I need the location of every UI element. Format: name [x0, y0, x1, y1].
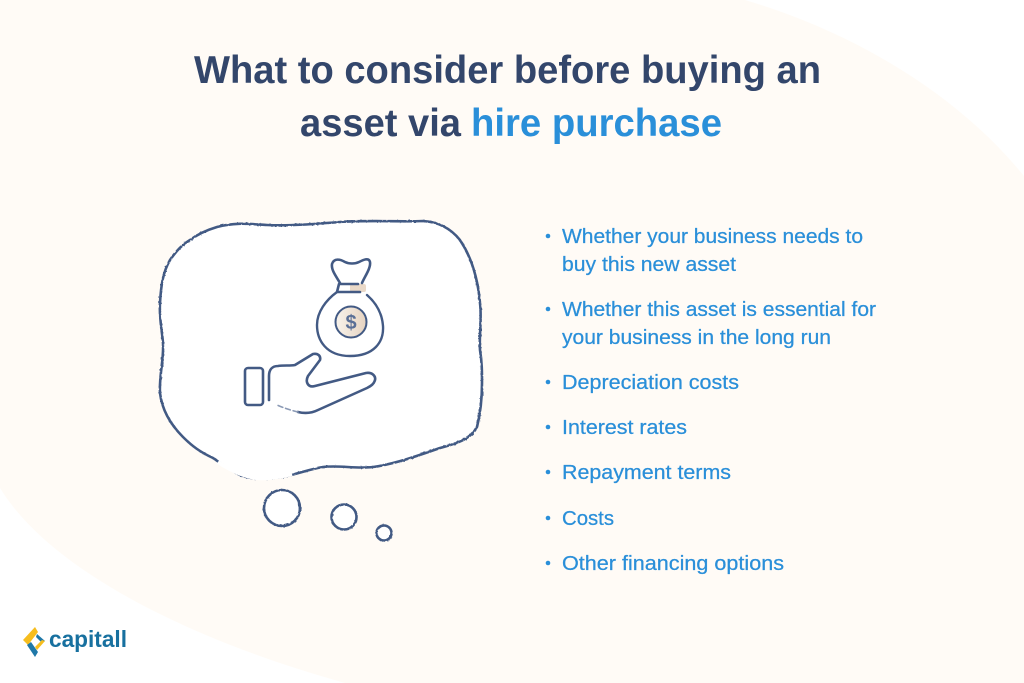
item 2: Whether this asset is essential for [562, 299, 876, 321]
coin [336, 306, 366, 338]
hand lower edge [277, 405, 298, 412]
item 1: buy this new asset [562, 254, 736, 276]
title: asset via [300, 102, 461, 145]
thought bubble [160, 221, 482, 540]
bag band [350, 284, 366, 292]
bullet list [546, 226, 876, 575]
faded bubble bottom [218, 462, 292, 478]
logo [23, 626, 127, 657]
item 6: Costs [562, 508, 614, 530]
dollar sign: $ [345, 312, 357, 334]
item 4: Interest rates [562, 417, 687, 439]
item 1: Whether your business needs to [562, 226, 863, 248]
icon: hand [245, 354, 375, 413]
title [194, 49, 821, 145]
title: hire purchase [471, 102, 722, 145]
item 2 [546, 299, 876, 349]
logo mark [23, 627, 45, 657]
bag body [317, 292, 383, 356]
hand shape [269, 354, 375, 413]
bubble outline [160, 221, 482, 479]
title: What to consider before buying an [194, 49, 821, 92]
item 5: Repayment terms [562, 462, 731, 484]
bag neck [332, 259, 370, 283]
item 2: your business in the long run [562, 327, 831, 349]
logo wordmark: capitall [49, 626, 127, 652]
item 1 [546, 226, 863, 276]
small thought circles [264, 490, 392, 540]
icon: money bag [317, 259, 383, 356]
hand cuff [245, 368, 263, 405]
item 3: Depreciation costs [562, 372, 739, 394]
item 7: Other financing options [562, 553, 784, 575]
